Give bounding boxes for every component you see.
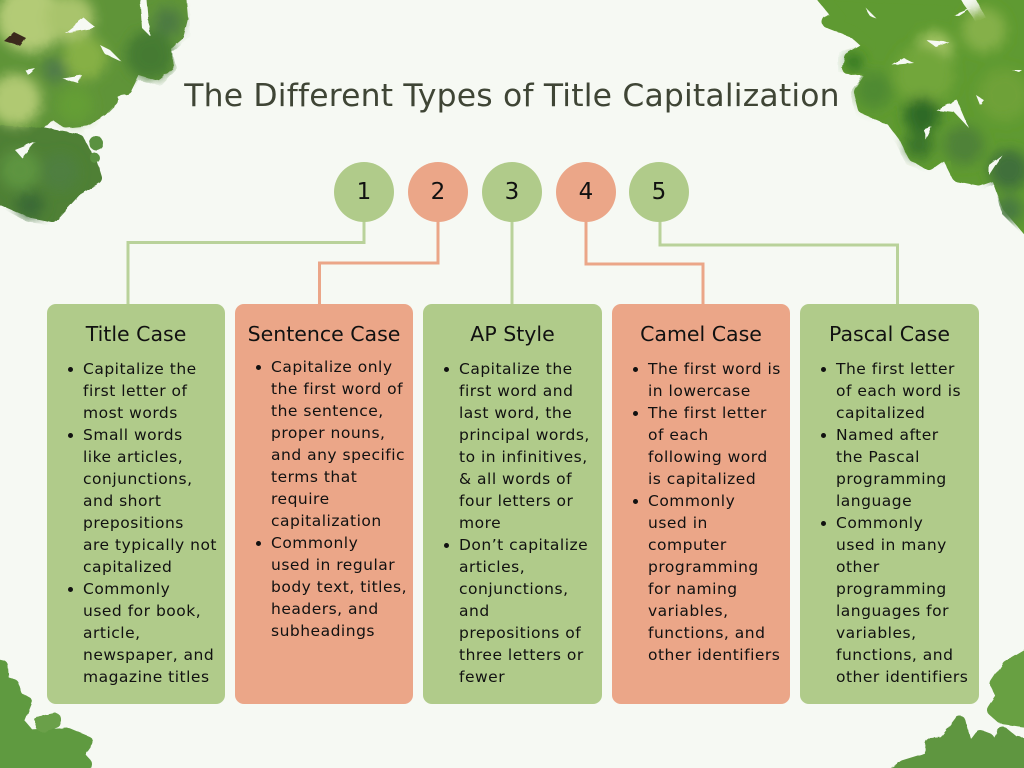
panel: Title Case: Capitalize the bbox=[83, 360, 197, 378]
panel: AP Style: fewer bbox=[459, 668, 505, 686]
panel: Title Case: used for book, bbox=[83, 602, 201, 620]
panel: Title Case: prepositions bbox=[83, 514, 184, 532]
panel: Sentence Case: headers, and bbox=[271, 600, 379, 618]
panel: Camel Case: The first letter bbox=[648, 404, 767, 422]
foliage: bottom right bbox=[891, 650, 1024, 768]
panel: AP Style bbox=[423, 304, 602, 704]
panel: Camel Case: following word bbox=[648, 448, 768, 466]
number 4 bbox=[556, 162, 616, 222]
panel: Camel Case: functions, and bbox=[648, 624, 765, 642]
panel: Pascal Case: language bbox=[836, 492, 912, 510]
panel: Camel Case: programming bbox=[648, 558, 759, 576]
panel: Sentence Case: the sentence, bbox=[271, 402, 384, 420]
panel: Title Case: Commonly bbox=[83, 580, 170, 598]
panel: Title Case: are typically not bbox=[83, 536, 217, 554]
panel: Sentence Case: and any specific bbox=[271, 446, 405, 464]
foliage: top right bbox=[817, 0, 1024, 234]
panel: AP Style: and bbox=[459, 602, 490, 620]
panel: Camel Case: for naming bbox=[648, 580, 738, 598]
number 2: 2 bbox=[431, 179, 445, 205]
panel: Sentence Case: used in regular bbox=[271, 556, 395, 574]
panel: Camel Case: Commonly bbox=[648, 492, 735, 510]
panel: Sentence Case: require bbox=[271, 490, 330, 508]
title: The Different Types of Title Capitalization bbox=[184, 78, 840, 114]
panel: Title Case: Title Case bbox=[86, 322, 186, 346]
panel: AP Style: more bbox=[459, 514, 501, 532]
panel: Camel Case: The first word is bbox=[648, 360, 781, 378]
panel: Sentence Case: the first word of bbox=[271, 380, 403, 398]
panel: Pascal Case: Pascal Case bbox=[829, 322, 950, 346]
panel: AP Style: & all words of bbox=[459, 470, 572, 488]
panel: Sentence Case: subheadings bbox=[271, 622, 375, 640]
panel: AP Style: first word and bbox=[459, 382, 573, 400]
panel: Sentence Case: body text, titles, bbox=[271, 578, 407, 596]
foliage: bottom left bbox=[0, 660, 93, 768]
panel: AP Style: last word, the bbox=[459, 404, 572, 422]
panel: AP Style: three letters or bbox=[459, 646, 584, 664]
panel: AP Style: principal words, bbox=[459, 426, 590, 444]
panel: Pascal Case: functions, and bbox=[836, 646, 953, 664]
panel: Pascal Case: Commonly bbox=[836, 514, 923, 532]
panel: Title Case: first letter of bbox=[83, 382, 188, 400]
panel: AP Style: Capitalize the bbox=[459, 360, 573, 378]
panel: Title Case: like articles, bbox=[83, 448, 183, 466]
panel: Title Case: newspaper, and bbox=[83, 646, 214, 664]
number 4: 4 bbox=[579, 179, 593, 205]
panel: Title Case: capitalized bbox=[83, 558, 172, 576]
number 2 bbox=[408, 162, 468, 222]
panel: Camel Case: Camel Case bbox=[640, 322, 762, 346]
panel: AP Style: AP Style bbox=[470, 322, 555, 346]
panel: Title Case: Small words bbox=[83, 426, 183, 444]
number 5 bbox=[629, 162, 689, 222]
panel: Sentence Case: Commonly bbox=[271, 534, 358, 552]
panel: Title Case: magazine titles bbox=[83, 668, 210, 686]
panel: Camel Case: variables, bbox=[648, 602, 729, 620]
number 1: 1 bbox=[357, 179, 371, 205]
panel: Sentence Case: terms that bbox=[271, 468, 357, 486]
number 3 bbox=[482, 162, 542, 222]
panel: Sentence Case: Sentence Case bbox=[248, 322, 400, 346]
panel: Camel Case: computer bbox=[648, 536, 727, 554]
panel: AP Style: four letters or bbox=[459, 492, 573, 510]
panel: Sentence Case: Capitalize only bbox=[271, 358, 393, 376]
panel: Pascal Case: The first letter bbox=[836, 360, 955, 378]
panel: Camel Case: in lowercase bbox=[648, 382, 751, 400]
panel: AP Style: Don’t capitalize bbox=[459, 536, 588, 554]
panel: Pascal Case: languages for bbox=[836, 602, 949, 620]
panel: Pascal Case: capitalized bbox=[836, 404, 925, 422]
panel: Camel Case: of each bbox=[648, 426, 709, 444]
panel: AP Style: prepositions of bbox=[459, 624, 581, 642]
panel: Sentence Case bbox=[235, 304, 413, 704]
panel: Title Case: conjunctions, bbox=[83, 470, 192, 488]
panel: Title Case: most words bbox=[83, 404, 178, 422]
panel: AP Style: conjunctions, bbox=[459, 580, 568, 598]
panel: Camel Case: used in bbox=[648, 514, 708, 532]
panel: Sentence Case: proper nouns, bbox=[271, 424, 386, 442]
panel: Pascal Case: variables, bbox=[836, 624, 917, 642]
panel: AP Style: to in infinitives, bbox=[459, 448, 588, 466]
panel: Pascal Case: programming bbox=[836, 470, 947, 488]
number 1 bbox=[334, 162, 394, 222]
panel: Title Case: and short bbox=[83, 492, 161, 510]
panel: Pascal Case: other bbox=[836, 558, 880, 576]
panel: Title Case: article, bbox=[83, 624, 141, 642]
panel: Sentence Case: capitalization bbox=[271, 512, 382, 530]
panel: Pascal Case: other identifiers bbox=[836, 668, 968, 686]
panel: Camel Case: is capitalized bbox=[648, 470, 756, 488]
panel: Pascal Case: used in many bbox=[836, 536, 947, 554]
panel: AP Style: articles, bbox=[459, 558, 525, 576]
number 5: 5 bbox=[652, 179, 666, 205]
panel: Pascal Case: programming bbox=[836, 580, 947, 598]
panel: Camel Case: other identifiers bbox=[648, 646, 780, 664]
panel: Pascal Case: the Pascal bbox=[836, 448, 920, 466]
panel: Camel Case bbox=[612, 304, 790, 704]
panel: Pascal Case: of each word is bbox=[836, 382, 961, 400]
number 3: 3 bbox=[505, 179, 519, 205]
foliage: top left bbox=[0, 0, 190, 224]
panel: Pascal Case: Named after bbox=[836, 426, 939, 444]
panel: Pascal Case bbox=[800, 304, 979, 704]
panel: Title Case bbox=[47, 304, 225, 704]
